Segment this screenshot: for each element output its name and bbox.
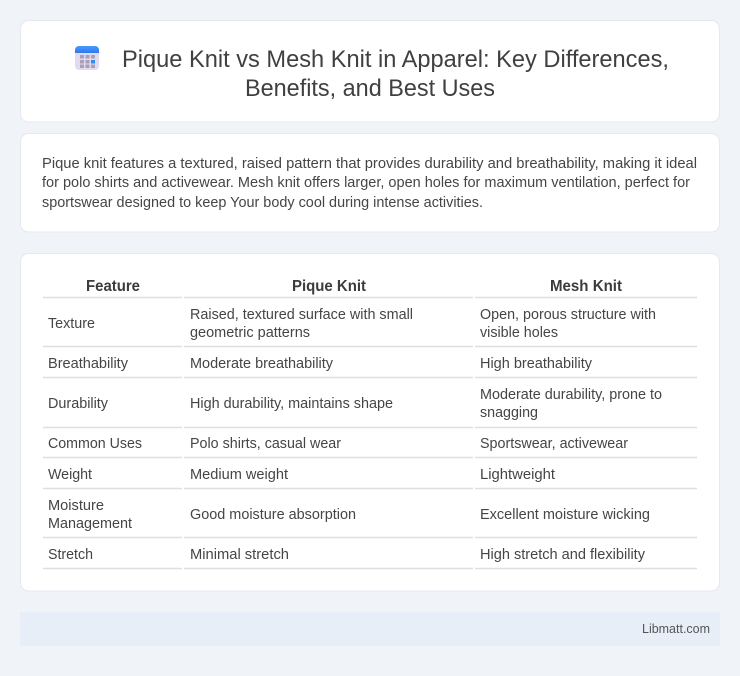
row: breathability: Breathability <box>48 356 129 372</box>
row: moisture management: Moisture <box>48 498 104 514</box>
row: texture: Texture <box>48 316 95 332</box>
row: stretch: High stretch and flexibility <box>480 547 646 563</box>
table header row: Feature <box>86 278 140 295</box>
row: breathability: Moderate breathability <box>190 356 334 372</box>
row: texture <box>43 307 697 346</box>
panel: header card <box>20 20 720 122</box>
row: weight: Medium weight <box>190 467 288 483</box>
intro paragraph <box>42 156 697 211</box>
row: weight <box>43 467 697 488</box>
title: Benefits, and Best Uses <box>245 75 495 102</box>
footer <box>20 612 720 646</box>
row: common uses: Common Uses <box>48 436 142 452</box>
row: weight: Lightweight <box>480 467 555 483</box>
row: durability <box>43 387 697 428</box>
title <box>122 46 669 102</box>
intro paragraph: for polo shirts and activewear. Mesh knit offers larger, open holes for maximum ventilation, perfect for <box>42 175 690 191</box>
row: weight: Weight <box>48 467 92 483</box>
icon: calendar <box>75 46 99 70</box>
row: common uses: Sportswear, activewear <box>480 436 628 452</box>
row: texture: geometric patterns <box>190 325 310 341</box>
row: durability: Durability <box>48 396 109 412</box>
row: breathability <box>43 356 697 378</box>
row: stretch <box>43 547 697 568</box>
row: moisture management: Management <box>48 516 132 532</box>
row: durability: High durability, maintains shape <box>190 396 393 412</box>
footer: Libmatt.com <box>642 621 710 636</box>
row: common uses: Polo shirts, casual wear <box>190 436 341 452</box>
table header row: Pique Knit <box>292 278 367 295</box>
table header row <box>43 278 697 298</box>
row: moisture management: Good moisture absorption <box>190 507 356 523</box>
intro paragraph: Pique knit features a textured, raised pattern that provides durability and breathability, making it ideal <box>42 156 697 172</box>
panel: comparison table card <box>20 254 720 591</box>
title: Pique Knit vs Mesh Knit in Apparel: Key Differences, <box>122 46 669 73</box>
row: moisture management: Excellent moisture wicking <box>480 507 650 523</box>
table header row: Mesh Knit <box>550 278 623 295</box>
row: breathability: High breathability <box>480 356 593 372</box>
row: stretch: Minimal stretch <box>190 547 289 563</box>
intro paragraph: sportswear designed to keep Your body cool during intense activities. <box>42 195 483 211</box>
row: stretch: Stretch <box>48 547 93 563</box>
row: moisture management <box>43 498 697 538</box>
row: texture: Raised, textured surface with small <box>190 307 413 323</box>
row: texture: Open, porous structure with <box>480 307 656 323</box>
row: durability: Moderate durability, prone to <box>480 387 662 403</box>
panel: intro text card <box>20 134 720 232</box>
row: common uses <box>43 436 697 458</box>
row: durability: snagging <box>480 405 538 421</box>
row: texture: visible holes <box>480 325 558 341</box>
